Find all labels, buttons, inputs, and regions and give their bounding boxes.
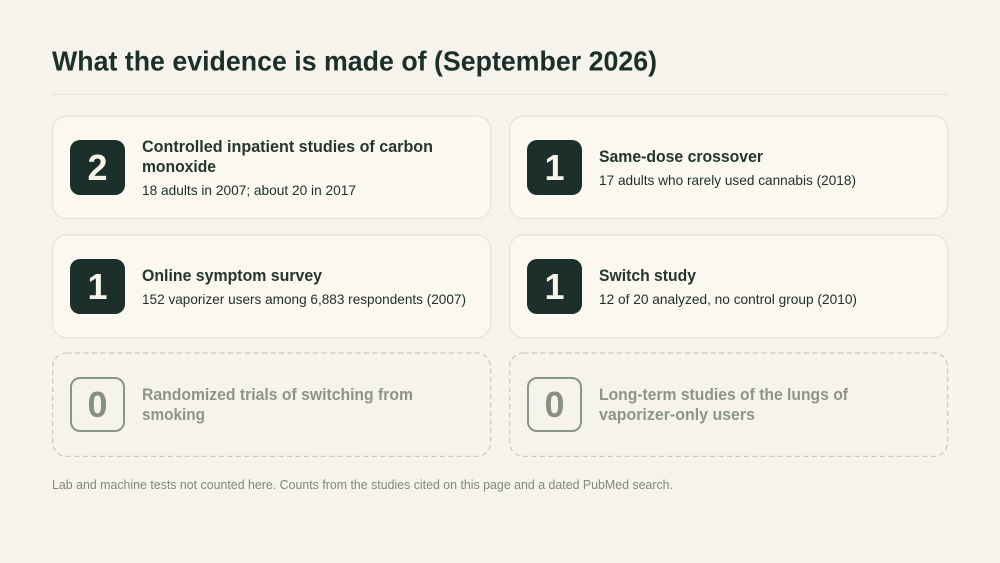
heading: long-term lung studies: Long-term studies of the lungs of [599,385,848,404]
detail: controlled inpatient studies: 18 adults in 2007; about 20 in 2017 [142,182,356,198]
heading: online symptom survey: Online symptom survey [142,266,323,285]
panel: long-term lung studies (none) [510,353,948,456]
panel: controlled inpatient studies [53,116,491,219]
heading: switch study: Switch study [599,266,696,285]
panel: switch study [510,235,948,338]
badge: count 1 [527,259,582,314]
panel: randomized trials (none) [53,353,491,456]
heading: randomized trials: smoking [142,405,205,424]
heading: controlled inpatient studies: monoxide [142,157,216,176]
heading: same-dose crossover: Same-dose crossover [599,147,763,166]
badge: count 2: 2 [87,147,108,188]
badge: count 0 [528,378,581,431]
detail: switch study: 12 of 20 analyzed, no control group (2010) [599,291,857,307]
detail: online symptom survey: 152 vaporizer users among 6,883 respondents (2007) [142,291,466,307]
badge: count 2 [70,140,125,195]
heading: randomized trials: Randomized trials of switching from [142,385,413,404]
badge: count 0: 0 [87,384,108,425]
title: What the evidence is made of (September 2026) [52,46,657,76]
badge: count 1 [70,259,125,314]
heading: controlled inpatient studies: Controlled inpatient studies of carbon [142,137,433,156]
panel: online symptom survey [53,235,491,338]
detail: same-dose crossover: 17 adults who rarely used cannabis (2018) [599,172,856,188]
badge: count 0 [71,378,124,431]
badge: count 0: 0 [544,384,565,425]
heading: long-term lung studies: vaporizer-only users [599,405,755,424]
badge: count 1: 1 [544,266,565,307]
badge: count 1: 1 [87,266,108,307]
badge: count 1: 1 [544,147,565,188]
footnote: Lab and machine tests not counted here. Counts from the studies cited on this page and a dated PubMed search. [52,478,673,492]
badge: count 1 [527,140,582,195]
panel: same-dose crossover [510,116,948,219]
